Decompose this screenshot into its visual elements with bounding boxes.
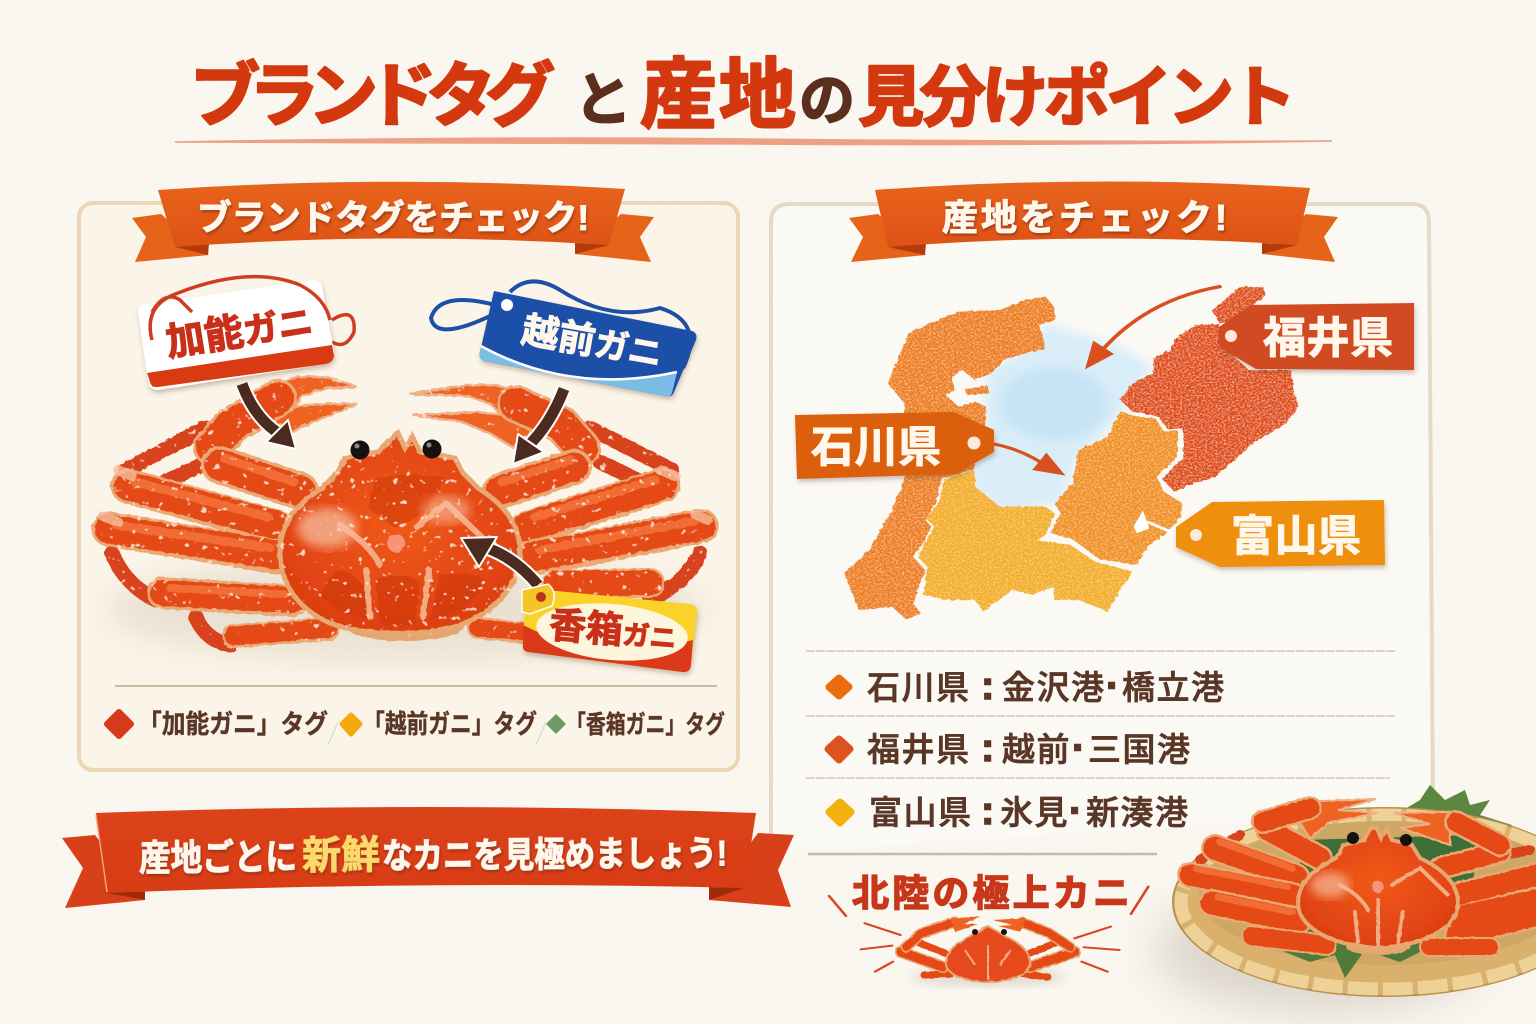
Toyama <box>1051 412 1182 565</box>
ribbon: origin heading: 産地をチェック! <box>942 197 1227 238</box>
legend: brand tags: 「越前ガニ」タグ <box>363 709 537 739</box>
tag: 加能ガニ <box>138 277 354 390</box>
legend: brand tags <box>107 709 725 745</box>
tag: 石川県: 石川県 <box>811 424 941 472</box>
row: Fukui: : <box>981 726 996 770</box>
ribbon: bottom message: 産地ごとに <box>139 836 297 879</box>
divider: left panel <box>115 685 717 687</box>
ribbon: bottom message: なカニを見極めましょう! <box>382 834 727 876</box>
row: Fukui: · <box>1072 726 1087 770</box>
title: と <box>574 68 632 133</box>
left claw <box>212 377 357 491</box>
row: Fukui: 三国港 <box>1088 731 1192 768</box>
arrow: Fukui <box>1099 287 1220 353</box>
tag: 富山県: 富山県 <box>1231 513 1361 561</box>
eyes <box>350 440 442 460</box>
panel: origin <box>771 204 1433 852</box>
row: Ishikawa: : <box>981 664 996 708</box>
tag: 福井県 <box>1219 303 1414 370</box>
right claw <box>410 385 582 491</box>
tag: 香箱ガニ: 香箱ガニ <box>547 604 679 656</box>
carapace pattern <box>297 474 490 625</box>
row: Toyama: : <box>981 789 996 833</box>
row: Fukui: 福井県 <box>867 731 970 768</box>
tag: 石川県 <box>795 412 994 479</box>
row: Ishikawa: · <box>1106 664 1121 708</box>
tag: 越前ガニ: 越前ガニ <box>519 309 666 374</box>
row: Toyama <box>829 789 1190 833</box>
tag: 加能ガニ: 加能ガニ <box>163 299 316 365</box>
row: Toyama: 富山県 <box>869 794 972 831</box>
plate of crab <box>1155 785 1536 1012</box>
row: Toyama: 新湊港 <box>1086 794 1190 831</box>
tag: 越前ガニ <box>431 281 696 397</box>
crab shadow <box>105 558 705 662</box>
map: Hokuriku <box>844 287 1299 620</box>
basket <box>1173 808 1536 996</box>
ribbon: bottom message <box>62 807 794 908</box>
plate crab claws <box>1290 799 1450 845</box>
title <box>190 53 1296 139</box>
row: Ishikawa: 石川県 <box>867 669 970 706</box>
left legs <box>103 470 328 636</box>
inner leaves <box>1250 900 1440 978</box>
ribbon: brand tag heading: ブランドタグをチェック! <box>197 198 589 238</box>
ribbon: bottom message: 新鮮 <box>302 834 380 878</box>
carapace <box>280 433 520 633</box>
right legs <box>478 470 708 634</box>
title: ブランドタグ <box>190 57 555 135</box>
Gifu-side yellow <box>918 470 1133 612</box>
abdomen <box>347 613 463 641</box>
row: Ishikawa: 橋立港 <box>1122 669 1226 706</box>
row: Toyama: 氷見 <box>1000 794 1069 831</box>
title: 産地 <box>640 53 796 139</box>
Fukui <box>1120 287 1299 492</box>
row: Toyama: · <box>1069 789 1084 833</box>
origin list <box>806 651 1395 833</box>
panel: brand tag <box>79 203 738 770</box>
plate shadow <box>1155 888 1485 1012</box>
arrows to crab <box>242 384 564 585</box>
ribbon: brand tag heading <box>132 182 654 262</box>
sea <box>971 323 1153 513</box>
leg links <box>112 428 700 645</box>
tag: 香箱ガニ <box>522 584 697 672</box>
title: 見分けポイント <box>858 60 1296 134</box>
arrow: Ishikawa <box>994 444 1050 468</box>
leaves <box>1395 785 1512 850</box>
ribbon: origin heading <box>849 181 1338 262</box>
Ishikawa <box>844 297 1056 620</box>
plate crab <box>1190 799 1536 955</box>
heading: 北陸の極上カニ: 北陸の極上カニ <box>852 873 1130 914</box>
tag: 富山県 <box>1176 500 1385 567</box>
row: Fukui: 越前 <box>1002 731 1071 768</box>
main crab illustration <box>103 377 708 645</box>
legend: brand tags: 「香箱ガニ」タグ <box>566 710 725 739</box>
legend: brand tags: 「加能ガニ」タグ <box>138 709 328 739</box>
row: Fukui <box>828 726 1192 770</box>
tag: 福井県: 福井県 <box>1263 315 1393 363</box>
small crab <box>901 917 1075 987</box>
row: Ishikawa: 金沢港 <box>1002 669 1106 706</box>
heading: 北陸の極上カニ <box>829 873 1148 972</box>
arrow: Toyama <box>1147 522 1174 533</box>
row: Ishikawa <box>829 664 1226 708</box>
title: の <box>799 69 855 132</box>
